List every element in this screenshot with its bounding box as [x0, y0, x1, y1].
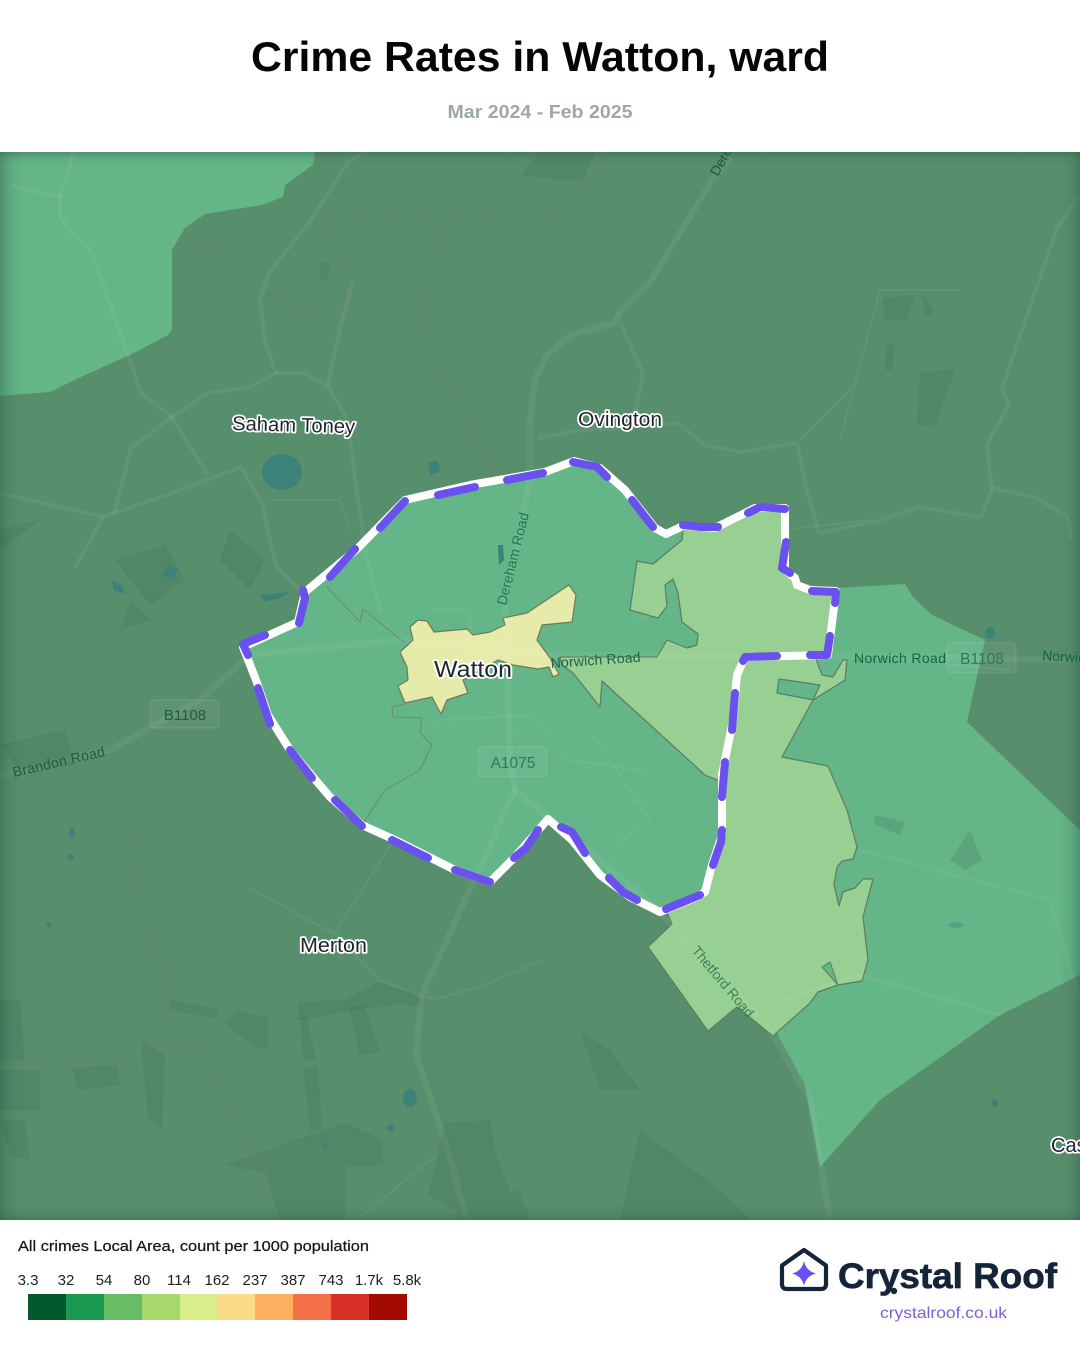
legend tick labels: 54 [96, 1272, 112, 1289]
legend tick labels [18, 1272, 422, 1289]
road name labels: Dereham Road [493, 511, 532, 607]
region: small medium-rate block [777, 679, 820, 700]
place labels: Ovington [578, 409, 662, 431]
website url: crystalroof.co.uk [880, 1305, 1008, 1322]
region: eastern lower-rate area [560, 508, 873, 1036]
logo wordmark: Crystal Roof [838, 1257, 1057, 1296]
water: Saham Mere lake [262, 454, 302, 490]
place labels [232, 409, 1080, 1157]
legend tick labels: 237 [242, 1272, 268, 1289]
road name labels: Norwich Road [854, 650, 946, 666]
region: central ward area [243, 461, 745, 912]
logo: Crystal Roof [782, 1250, 1057, 1322]
legend tick labels: 3.3 [18, 1272, 38, 1289]
shield: B1108 east [947, 643, 1016, 673]
legend tick labels: 1.7k [355, 1272, 384, 1289]
legend colour scale [28, 1294, 407, 1320]
legend tick labels: 32 [58, 1272, 74, 1289]
region: eastern medium-rate area [775, 584, 1080, 1167]
parish boundary lines [0, 155, 605, 1234]
place labels: Saham Toney [232, 413, 355, 438]
ward boundary: white and purple dashed outline [243, 461, 836, 912]
place labels: Merton [300, 935, 367, 957]
legend tick labels: 114 [167, 1272, 191, 1289]
road name labels [11, 87, 1080, 1020]
shield: B1108 east: B1108 [960, 651, 1004, 668]
road name labels: Brandon Road [11, 743, 106, 780]
region: Watton town centre highest-rate area [398, 585, 576, 714]
road shields [150, 643, 1016, 777]
subtitle: date range: Mar 2024 - Feb 2025 [448, 101, 632, 122]
logo key detail on the y [891, 1288, 897, 1294]
legend tick labels: 743 [318, 1272, 344, 1289]
legend tick labels: 5.8k [393, 1272, 422, 1289]
place labels: Watton [434, 656, 512, 682]
water: small ponds [46, 460, 998, 1150]
legend tick labels: 162 [204, 1272, 230, 1289]
legend tick labels: 387 [280, 1272, 306, 1289]
road name labels: Thetford Road [689, 943, 758, 1020]
legend [18, 1238, 422, 1320]
shield: B1108 west: B1108 [164, 707, 206, 724]
road name labels: Dereham Road [707, 87, 765, 178]
woodland and field patches [20, 756, 982, 1213]
legend title: All crimes Local Area, count per 1000 population [18, 1238, 369, 1255]
road name labels: Norwich Road [550, 649, 641, 671]
shield: B1108 west [150, 700, 219, 728]
region: north-west medium-rate area [0, 152, 315, 396]
shield: A1075: A1075 [491, 755, 535, 772]
legend tick labels: 80 [134, 1272, 150, 1289]
title: Crime Rates in Watton, ward [251, 33, 829, 80]
icon: house with star [782, 1250, 826, 1289]
shield: A1075 [478, 747, 547, 777]
vignette edges [0, 152, 1080, 1220]
region: small medium-rate notch [822, 962, 838, 985]
